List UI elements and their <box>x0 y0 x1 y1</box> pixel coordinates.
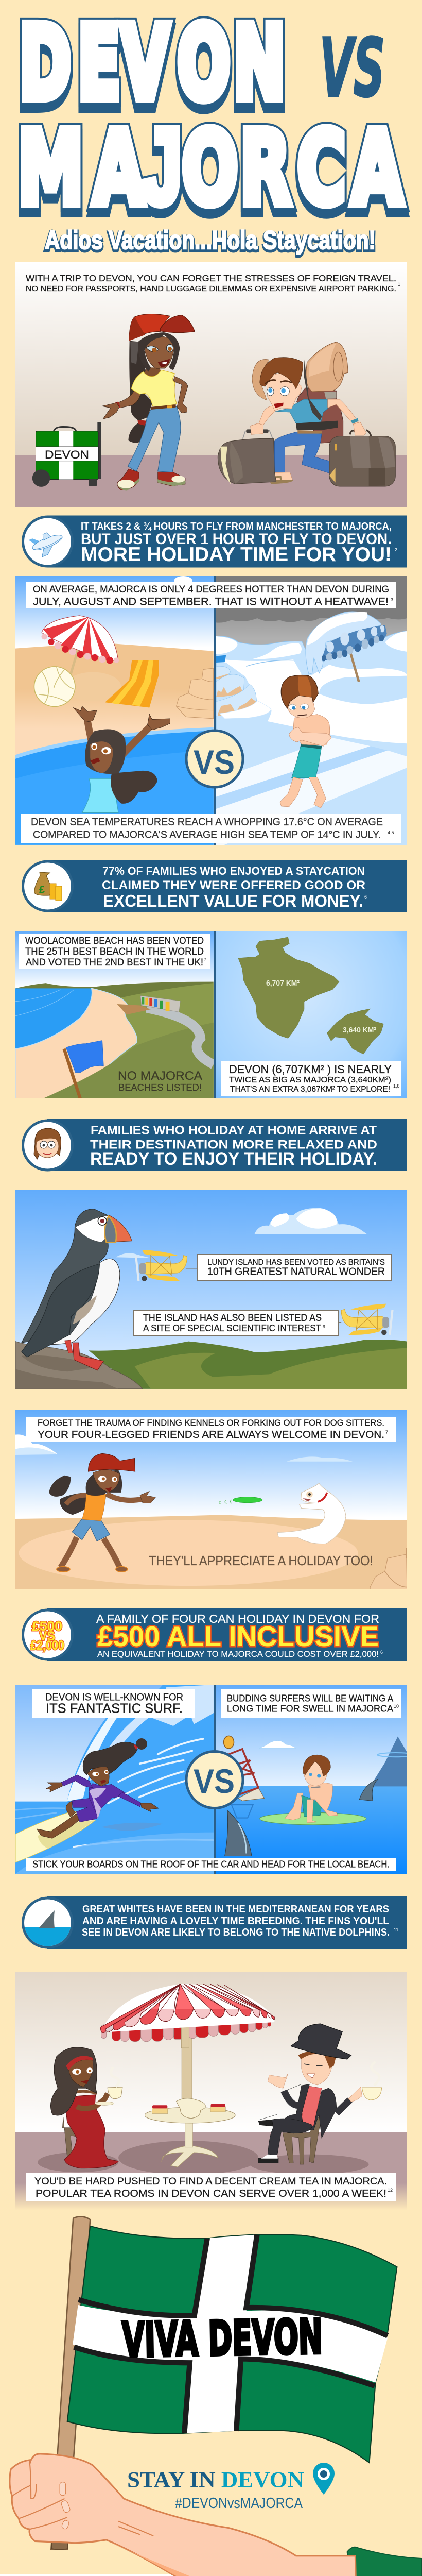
banner text <box>96 1612 383 1659</box>
callout: sea temperature: 4,5 <box>388 830 394 835</box>
map: Devon and Majorca: 6,707 KM² <box>266 979 300 988</box>
banner text: GREAT WHITES HAVE BEEN IN THE MEDITERRANEAN FOR YEARS <box>82 1904 389 1915</box>
callout: size comparison: TWICE AS BIG AS MAJORCA (3,640KM²) <box>229 1076 391 1084</box>
banner text: 6 <box>380 1650 383 1655</box>
banner text: FAMILIES WHO HOLIDAY AT HOME ARRIVE AT <box>91 1123 377 1138</box>
callout: natural wonder <box>197 1255 392 1280</box>
heading: MAJORCA: ORCA <box>182 111 403 228</box>
callout: air temperature <box>26 582 396 608</box>
banner: flight time <box>22 515 407 568</box>
campaign: stay in Devon: STAY IN DEVON <box>127 2468 304 2493</box>
illustration: puffin <box>22 1209 132 1370</box>
banner text <box>81 521 397 566</box>
banner text: AND ARE HAVING A LOVELY TIME BREEDING. THE FINS YOU'LL <box>82 1916 389 1927</box>
banner text: £500 ALL INCLUSIVE <box>97 1620 379 1652</box>
banner text: SEE IN DEVON ARE LIKELY TO BELONG TO THE NATIVE DOLPHINS. <box>82 1927 390 1938</box>
callout: air temperature: JULY, AUGUST AND SEPTEMBER. THAT IS WITHOUT A HEATWAVE! <box>33 596 389 608</box>
callout: cream tea: YOU'D BE HARD PUSHED TO FIND A DECENT CREAM TEA IN MAJORCA. <box>34 2176 387 2187</box>
label: no Majorca beaches <box>118 1069 203 1093</box>
character: man in top hat <box>258 2024 382 2164</box>
callout: dog sitters: 7 <box>385 1430 388 1435</box>
scene: frozen Devon beach <box>216 573 407 849</box>
illustration: striped parasol <box>100 1984 274 2048</box>
scene: landscape and clouds <box>15 1208 407 1389</box>
callout: Woolacombe: WOOLACOMBE BEACH HAS BEEN VOTED <box>25 935 204 946</box>
icon: smiling woman <box>34 1128 61 1159</box>
banner: price <box>22 1608 407 1661</box>
callout: size comparison: 1,8 <box>393 1083 400 1089</box>
character: man with overloaded luggage <box>218 342 395 486</box>
banner text: CLAIMED THEY WERE OFFERED GOOD OR <box>102 878 365 892</box>
heading: MAJORCA: J <box>143 114 182 233</box>
scene: shadows <box>38 2141 369 2175</box>
divider <box>214 931 216 1098</box>
panel: Lundy Island <box>15 1190 407 1389</box>
heading: MAJORCA: MA <box>17 110 145 227</box>
callout: scientific interest: A SITE OF SPECIAL SCIENTIFIC INTEREST <box>143 1323 321 1333</box>
banner: value for money <box>22 860 407 912</box>
divider <box>214 1685 216 1874</box>
scene: beach <box>15 1434 407 1589</box>
callout: cream tea <box>26 2173 396 2201</box>
label: no Majorca beaches: BEACHES LISTED! <box>118 1082 202 1093</box>
scene: sunny Majorca beach <box>15 576 214 845</box>
banner: sharks <box>22 1896 407 1949</box>
heading: DEVON: DEVON <box>20 12 285 129</box>
panel text: WITH A TRIP TO DEVON, YOU CAN FORGET THE STRESSES OF FOREIGN TRAVEL. <box>26 273 396 283</box>
badge: VS: VS <box>194 1762 235 1800</box>
scene: Woolacombe beach <box>15 931 214 1098</box>
heading: MAJORCA: J <box>143 107 182 226</box>
panel text: 1 <box>398 282 400 287</box>
panel: cream tea <box>15 1972 407 2210</box>
illustration: biplane one <box>136 1250 197 1281</box>
heading: MAJORCA: ORCA <box>182 110 403 227</box>
banner text: 6 <box>364 894 367 900</box>
callout: Woolacombe: THE 25TH BEST BEACH IN THE WORLD <box>25 946 204 957</box>
flag text: VIVA DEVON <box>122 2309 323 2368</box>
banner text <box>102 865 367 910</box>
panel text: NO NEED FOR PASSPORTS, HAND LUGGAGE DILEMMAS OR EXPENSIVE AIRPORT PARKING. <box>26 284 396 293</box>
banner text: 11 <box>394 1927 398 1933</box>
icon: price comparison: £500 <box>32 1619 62 1634</box>
badge: VS <box>186 731 243 787</box>
badge: VS <box>186 1752 243 1808</box>
icon: money bag and coins: £ <box>39 884 45 895</box>
heading: MAJORCA <box>17 107 403 233</box>
banner text: BUT JUST OVER 1 HOUR TO FLY TO DEVON. <box>81 531 392 548</box>
character: white dog <box>277 1483 346 1544</box>
banner text: EXCELLENT VALUE FOR MONEY. <box>103 891 363 910</box>
banner text: IT TAKES 2 & ¾ HOURS TO FLY FROM MANCHESTER TO MAJORCA, <box>81 521 392 532</box>
icon: steam <box>116 2086 375 2088</box>
campaign: stay in Devon <box>127 2463 335 2512</box>
panel: beaches and size <box>15 931 407 1098</box>
icon: price comparison: £2,000 <box>30 1638 64 1653</box>
banner text: READY TO ENJOY THEIR HOLIDAY. <box>90 1149 377 1169</box>
banner text: 77% OF FAMILIES WHO ENJOYED A STAYCATION <box>102 865 365 877</box>
heading: MAJORCA: MA <box>17 111 145 228</box>
banner text: AN EQUIVALENT HOLIDAY TO MAJORCA COULD COST OVER £2,000! <box>97 1649 379 1659</box>
banner text: 2 <box>395 547 397 552</box>
icon: price comparison <box>30 1619 64 1653</box>
panel: dogs welcome <box>15 1410 407 1589</box>
callout: dog sitters: FORGET THE TRAUMA OF FINDING KENNELS OR FORKING OUT FOR DOG SITTERS. <box>38 1418 384 1428</box>
callout: Woolacombe: AND VOTED THE 2ND BEST IN THE UK! <box>26 957 203 968</box>
label: DEVON on suitcase: DEVON <box>45 448 89 461</box>
icon: Devon suitcase <box>32 422 101 487</box>
icon: money bag and coins <box>34 872 62 901</box>
icon: location pin <box>313 2463 335 2495</box>
banner text: THEIR DESTINATION MORE RELAXED AND <box>90 1138 377 1152</box>
illustration: arm holding flag <box>10 2454 422 2576</box>
callout: scientific interest <box>134 1310 338 1336</box>
callout: air temperature: ON AVERAGE, MAJORCA IS ONLY 4 DEGREES HOTTER THAN DEVON DURING <box>33 584 389 595</box>
heading: MAJORCA: MA <box>17 116 145 233</box>
scene: Devon surf <box>15 1685 214 1874</box>
character: woman with red cap <box>102 314 195 491</box>
illustration: table and tea set <box>145 2030 235 2167</box>
character: woman throwing frisbee <box>49 1453 155 1572</box>
callout: fantastic surf: DEVON IS WELL-KNOWN FOR <box>45 1692 183 1703</box>
callout: swell in Majorca: 10 <box>394 1704 399 1709</box>
label: no Majorca beaches: NO MAJORCA <box>118 1069 203 1083</box>
callout: swell in Majorca <box>221 1689 401 1718</box>
banner text <box>82 1904 398 1938</box>
callout: fantastic surf <box>32 1689 195 1718</box>
illustration: biplane two <box>338 1304 393 1335</box>
icon: frisbee <box>219 1497 262 1504</box>
panel: temperature comparison <box>15 573 407 849</box>
callout: Woolacombe: 7 <box>204 957 206 962</box>
badge: VS: VS <box>194 743 235 781</box>
callout: natural wonder: 10TH GREATEST NATURAL WONDER <box>207 1266 385 1278</box>
callout: cream tea: POPULAR TEA ROOMS IN DEVON CAN SERVE OVER 1,000 A WEEK! <box>36 2188 386 2199</box>
sources background <box>0 2574 422 2576</box>
hashtag: #DEVONvsMAJORCA <box>175 2495 303 2512</box>
callout: sea temperature: COMPARED TO MAJORCA'S AVERAGE HIGH SEA TEMP OF 14°C IN JULY. <box>33 828 381 841</box>
callout: Woolacombe <box>19 934 210 969</box>
callout: size comparison: DEVON (6,707KM² ) IS NEARLY <box>229 1063 392 1076</box>
heading: MAJORCA: J <box>143 108 182 227</box>
panel: surf comparison <box>15 1685 414 1874</box>
heading: MAJORCA: ORCA <box>182 116 403 233</box>
callout: swell in Majorca: LONG TIME FOR SWELL IN MAJORCA <box>227 1703 394 1714</box>
character: woman in red dress <box>50 2047 122 2168</box>
callout: size comparison: THAT'S AN EXTRA 3,067KM² TO EXPLORE! <box>230 1085 390 1094</box>
icon: price comparison: VS <box>39 1629 55 1643</box>
callout: scientific interest: 9 <box>323 1324 325 1329</box>
callout: dog sitters <box>26 1417 396 1442</box>
heading: DEVON: DEVON <box>20 5 285 122</box>
panel: travel stress <box>15 262 407 507</box>
callout: air temperature: 3 <box>391 597 393 602</box>
callout: swell in Majorca: BUDDING SURFERS WILL BE WAITING A <box>227 1693 394 1703</box>
map: Devon and Majorca: 3,640 KM² <box>343 1026 376 1035</box>
icon: aeroplane <box>29 528 66 559</box>
callout: dog sitters: YOUR FOUR-LEGGED FRIENDS ARE ALWAYS WELCOME IN DEVON. <box>38 1429 384 1440</box>
callout: size comparison <box>221 1061 401 1096</box>
callout: cream tea: 12 <box>388 2188 393 2193</box>
icon: shark fin <box>23 1910 73 1947</box>
callout: fantastic surf: ITS FANTASTIC SURF. <box>46 1700 183 1716</box>
callout: scientific interest: THE ISLAND HAS ALSO BEEN LISTED AS <box>143 1313 322 1324</box>
sources <box>0 2574 422 2576</box>
panel text <box>26 273 400 293</box>
banner text: A FAMILY OF FOUR CAN HOLIDAY IN DEVON FOR <box>96 1612 379 1625</box>
title: Devon vs Majorca <box>17 5 403 233</box>
banner: relaxed families <box>22 1119 407 1172</box>
callout: local beach: STICK YOUR BOARDS ON THE ROOF OF THE CAR AND HEAD FOR THE LOCAL BEACH. <box>32 1859 390 1869</box>
illustration: Devon flag <box>51 2216 397 2549</box>
callout: sea temperature <box>21 814 401 843</box>
callout: natural wonder: LUNDY ISLAND HAS BEEN VOTED AS BRITAIN'S <box>207 1258 385 1267</box>
scene: Majorca flat sea <box>216 1685 414 1874</box>
banner text <box>90 1123 377 1169</box>
caption: holiday too: THEY'LL APPRECIATE A HOLIDAY TOO! <box>149 1553 373 1568</box>
heading: DEVON: DEVON <box>20 6 285 123</box>
banner text: MORE HOLIDAY TIME FOR YOU! <box>81 544 392 566</box>
callout: sea temperature: DEVON SEA TEMPERATURES REACH A WHOPPING 17.6°C ON AVERAGE <box>31 816 383 828</box>
map: Devon and Majorca <box>216 931 407 1098</box>
divider <box>214 576 216 845</box>
